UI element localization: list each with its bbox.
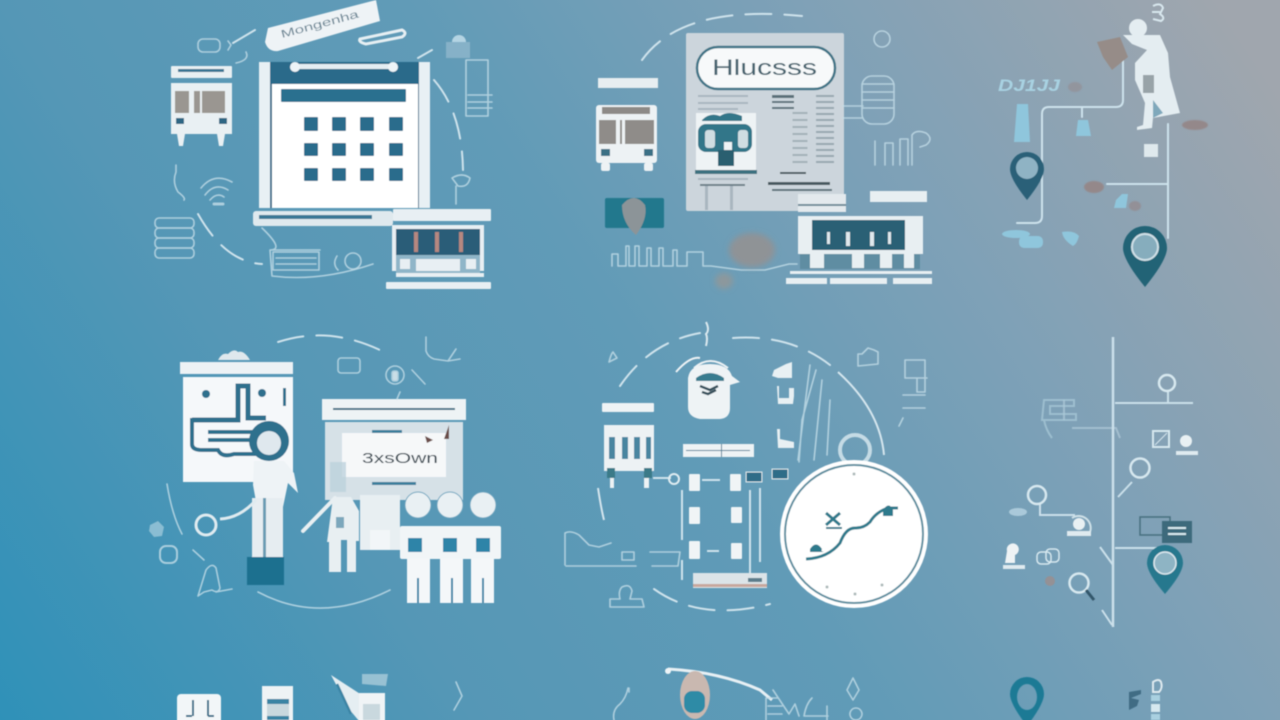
timeline trunk bbox=[1112, 337, 1114, 627]
notes above worker bbox=[1152, 4, 1163, 21]
icon: road stripes bbox=[798, 365, 830, 462]
icon: faded pentagon bbox=[149, 521, 164, 537]
icon: map pin bbox=[1010, 677, 1044, 720]
brown blobs bbox=[1068, 82, 1208, 211]
icon: rice cooker badge bbox=[676, 322, 740, 419]
icon: station building bbox=[386, 209, 491, 289]
icon: clock base ring bbox=[840, 435, 870, 465]
icon: seats column bbox=[772, 362, 794, 448]
icon: framed window bbox=[262, 686, 293, 720]
clock face with route bbox=[780, 460, 928, 608]
panel: route clock bbox=[565, 322, 928, 610]
icon: right sketches bbox=[614, 678, 862, 720]
dashed arc bbox=[642, 14, 802, 60]
note card bbox=[265, 0, 380, 51]
pale label: DJ1JJ bbox=[998, 76, 1061, 95]
icon: seat row bbox=[683, 444, 754, 457]
icon: notice board bbox=[180, 350, 293, 482]
title pill: Hlucsss bbox=[712, 55, 817, 80]
icon: sign bar bbox=[602, 403, 654, 412]
icon: sign bar right bbox=[870, 191, 927, 202]
poster sheet bbox=[686, 33, 846, 212]
footer bar bbox=[693, 573, 767, 588]
icon: thin sketches bbox=[160, 337, 460, 596]
icon: document and lock bbox=[446, 35, 492, 204]
icon: presentation screen bbox=[322, 399, 466, 500]
icon: folded arrow card bbox=[331, 674, 388, 720]
dashed ring bbox=[167, 335, 390, 608]
icon: presentation screen: 3xsOwn bbox=[362, 450, 438, 467]
panel: calendar bbox=[155, 0, 492, 289]
figure: standing attendee bbox=[303, 462, 359, 572]
inset bus picture bbox=[696, 113, 756, 171]
icon: pin clip bbox=[360, 30, 405, 44]
icon: station building bbox=[786, 216, 932, 284]
faded sketch bbox=[454, 682, 462, 710]
figure: worker bbox=[1123, 19, 1180, 130]
icon: map pin large bbox=[1123, 226, 1167, 287]
panel: branching timeline bbox=[1003, 337, 1198, 627]
icon: calendar bbox=[253, 62, 430, 226]
icon: right sketches bbox=[843, 31, 930, 165]
icon: worker head with line bbox=[665, 668, 772, 719]
small icon chips bbox=[1003, 431, 1198, 600]
panel: bottom row, clipped icons bbox=[177, 668, 1162, 720]
icon: wifi signal bbox=[174, 165, 232, 204]
icon: landscape sketches bbox=[565, 348, 927, 607]
dashed ring bbox=[598, 333, 884, 610]
blob: brown parcel bbox=[1097, 37, 1128, 70]
icon: map pin small bbox=[1010, 152, 1044, 200]
figure: seated group bbox=[360, 492, 501, 603]
pale bar icons bbox=[1002, 104, 1128, 248]
sketch: skyline line bbox=[612, 246, 797, 270]
figure: presenter bbox=[196, 421, 298, 585]
icon: sign bar left bbox=[598, 78, 658, 88]
icon: map pin blocks bbox=[605, 198, 664, 235]
poster text lines bbox=[695, 95, 832, 210]
panel: worker route map bbox=[998, 4, 1208, 287]
icon: small sketches bbox=[198, 39, 361, 270]
pale square bbox=[1144, 144, 1158, 157]
icon: white tile bbox=[177, 694, 221, 720]
icon: stacked marks bbox=[1129, 680, 1162, 720]
icon: bus front bbox=[604, 425, 654, 488]
panel: timetable poster bbox=[596, 14, 932, 289]
diagram: node grid bbox=[653, 469, 788, 580]
note card: Mongenha bbox=[280, 8, 361, 41]
icon: bus bbox=[171, 66, 232, 146]
icon: bus bbox=[596, 105, 657, 171]
circle nodes bbox=[1028, 375, 1175, 592]
icon: map pin bbox=[1147, 545, 1183, 594]
dashed ring bbox=[198, 30, 463, 278]
blob: brown tree bbox=[715, 233, 775, 289]
icon: stacked discs bbox=[155, 218, 194, 258]
faded map sketch bbox=[1042, 400, 1076, 438]
title pill bbox=[697, 47, 835, 89]
branches bbox=[1040, 390, 1193, 625]
panel: training presentation bbox=[149, 335, 501, 608]
route lines bbox=[1017, 60, 1168, 238]
